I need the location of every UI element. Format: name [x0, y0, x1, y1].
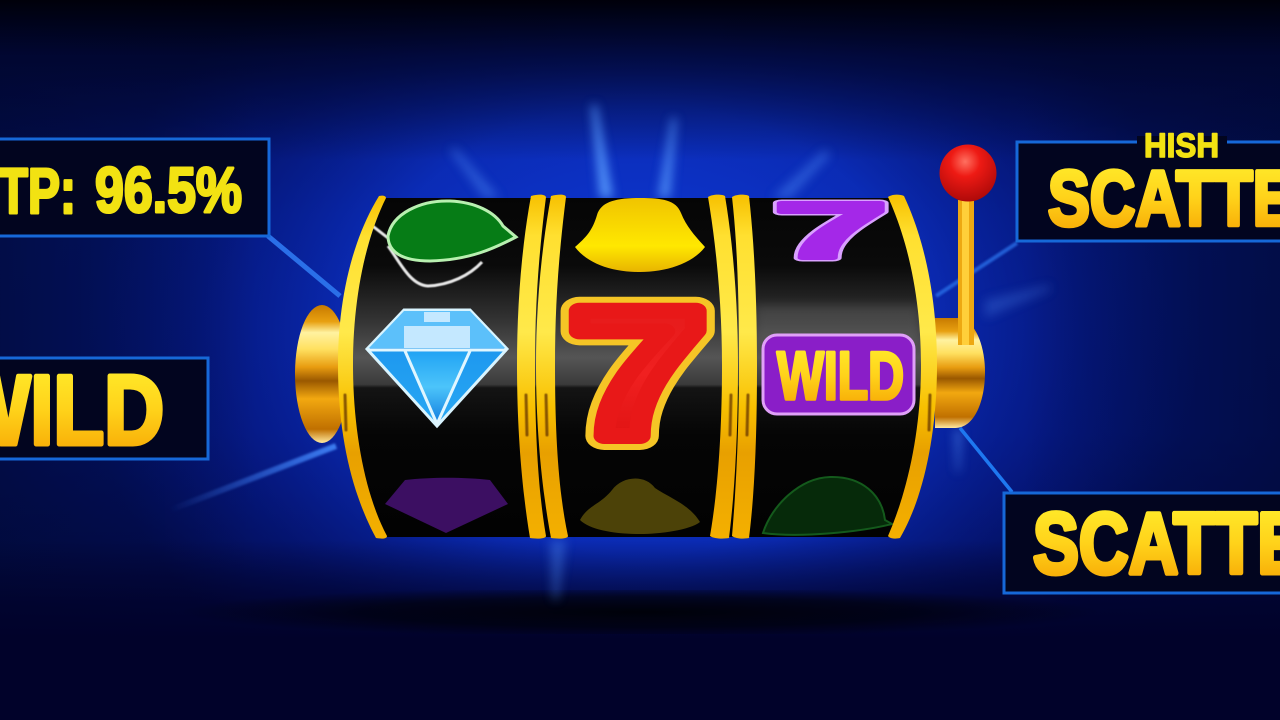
- connector: scatter to reel: [960, 428, 1012, 492]
- panel: scatter: [1004, 493, 1280, 593]
- panel: high scatter: [1017, 127, 1280, 242]
- light rays: [450, 105, 1050, 600]
- symbol: purple seven: 7: [773, 186, 889, 275]
- lever: [940, 144, 996, 345]
- symbol: green leaf: [370, 201, 516, 286]
- drum: [352, 198, 922, 537]
- symbol: dim green leaf: [763, 477, 892, 535]
- symbol: yellow lemon: [575, 198, 705, 272]
- panel: RTP: [0, 139, 269, 236]
- connector: WILD to reel: [170, 446, 336, 510]
- right gold ring: [888, 195, 937, 539]
- left gold ring: [338, 196, 387, 539]
- symbol: WILD badge: [763, 335, 914, 414]
- third reel sheen: [755, 305, 920, 345]
- gold divider: [536, 195, 568, 539]
- right knob: [935, 318, 985, 428]
- panel: WILD: [0, 355, 208, 465]
- symbol: red seven: 7: [569, 272, 707, 475]
- text: RTP value: 96.5%: [95, 154, 242, 226]
- left knob: [295, 305, 349, 443]
- symbol: blue diamond: [367, 310, 507, 426]
- gold divider: [732, 195, 757, 539]
- symbol: dim yellow lemon: [580, 478, 700, 534]
- gold divider: [517, 195, 546, 539]
- symbol: purple seven: 7: [773, 186, 889, 275]
- text: high label: HISH: [1144, 127, 1219, 165]
- connector: RTP to reel: [268, 236, 340, 296]
- lever ball: [940, 144, 996, 202]
- gold divider: [708, 195, 738, 539]
- badge text: WILD: [777, 338, 904, 414]
- symbol: red seven: 7: [569, 272, 707, 475]
- symbol: dim purple gem: [385, 478, 508, 533]
- divider shadow marks: [345, 395, 930, 435]
- connector: high scatter to reel: [936, 243, 1017, 296]
- slot machine: [295, 144, 996, 539]
- label gap: [1137, 136, 1227, 146]
